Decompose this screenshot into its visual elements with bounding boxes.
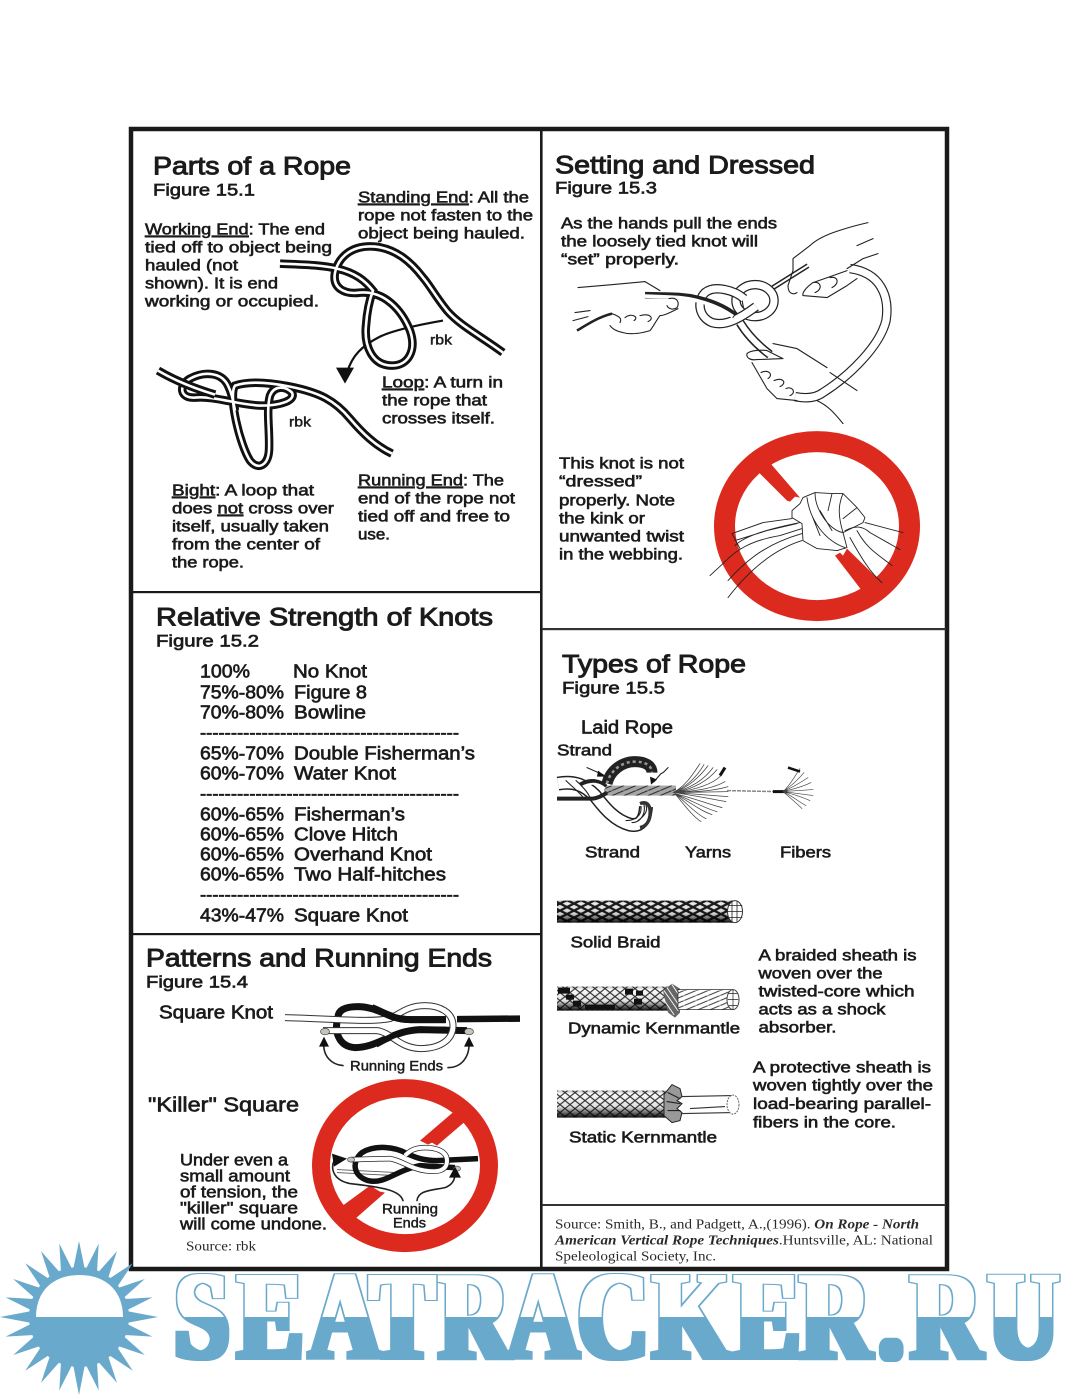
heading: Patterns and Running Ends: Patterns and Running Ends [146,945,492,973]
strength table: Double Fisherman’s [294,744,475,764]
strength table: 75%-80% [200,683,284,703]
strength table: ------------------------------------------ [200,785,459,804]
text: running end: use. [358,527,390,544]
page frame and panel dividers [131,129,947,1269]
label: Strand: Strand [557,743,612,760]
label: Running Ends: Ends [393,1215,426,1231]
panel: Parts of a Rope [144,153,533,572]
text: protective sheath: A protective sheath is [753,1060,931,1077]
text: tension warning [179,1151,327,1234]
text: working end: hauled (not [145,258,239,275]
text: standing end [358,190,533,243]
illustration: dynamic kernmantle [557,984,739,1018]
label: Running Ends: Running Ends [350,1058,443,1074]
text: bight [172,483,335,572]
labels: strand yarns fibers: Fibers [780,845,831,862]
labels: strand yarns fibers: Yarns [685,845,731,862]
text: braided sheath [757,948,916,1037]
text: running end: end of the rope not [358,491,516,508]
label: Laid Rope: Laid Rope [581,718,673,738]
figure label 15.3: Figure 15.3 [555,179,657,198]
heading: Parts of a Rope: Parts of a Rope [153,153,351,181]
text: bight: does not cross over [172,501,335,518]
label: rbk: rbk [289,414,312,430]
text: not dressed: This knot is not [559,456,685,473]
text: not dressed: unwanted twist [559,529,685,546]
text: working end: tied off to object being [145,240,332,257]
text: bight: from the center of [172,537,321,554]
strength table: 100% [200,662,250,682]
illustration: solid braid [557,901,742,923]
text: hands pull: the loosely tied knot will [561,234,758,251]
text: braided sheath: A braided sheath is [758,948,916,965]
strength table: Bowline [294,703,366,723]
text: braided sheath: acts as a shock [758,1002,887,1019]
figure label 15.5: Figure 15.5 [562,679,665,698]
text: loop [382,375,503,428]
illustration: hands setting a knot [573,223,887,424]
text: hands pull [561,216,777,269]
strength table: 60%-65% [200,825,284,845]
text: not dressed: properly. Note [559,493,675,510]
strength table: 43%-47% [200,906,284,926]
text: tension warning: will come undone. [179,1215,327,1234]
strength table: Clove Hitch [294,825,398,845]
strength table: 65%-70% [200,744,284,764]
strength table [200,662,475,926]
label: Killer Square: "Killer" Square [148,1095,299,1117]
strength table: Square Knot [294,906,408,926]
heading: Types of Rope: Types of Rope [562,651,746,679]
text: not dressed: in the webbing. [559,547,683,564]
label: Running Ends: Running [382,1201,438,1217]
text: not dressed: the kink or [559,511,646,528]
source citation [554,1218,933,1265]
illustration: static kernmantle [557,1085,739,1123]
panel: Types of Rope [554,651,933,1265]
source citation: Source: Smith, B., and Padgett, A.,(1996). On Rope - North [555,1218,919,1233]
strength table: ------------------------------------------ [200,886,459,905]
strength table: Figure 8 [294,683,367,703]
strength table: No Knot [293,662,367,682]
text: protective sheath: woven tightly over the [752,1078,933,1095]
text: braided sheath: absorber. [758,1020,836,1037]
strength table: ------------------------------------------ [200,724,459,743]
text: working end: Working End : The end [145,222,325,239]
text: protective sheath: fibers in the core. [753,1115,896,1132]
text: loop: crosses itself. [382,411,495,428]
strength table: 60%-65% [200,865,284,885]
strength table: Fisherman’s [294,805,405,825]
text: braided sheath: woven over the [757,966,883,983]
figure label 15.1: Figure 15.1 [153,181,255,200]
heading: Relative Strength of Knots: Relative Strength of Knots [156,604,493,632]
strength table: 60%-70% [200,764,284,784]
labels: strand yarns fibers: Strand [585,845,640,862]
text: protective sheath [752,1060,933,1132]
text: hands pull: “set” properly. [561,252,679,269]
text: not dressed [559,456,685,564]
text: hands pull: As the hands pull the ends [561,216,777,233]
logo: SEATRACKER.RU wordmark: SEATRACKER.RU [175,1248,1059,1386]
illustration: square knot [285,1006,520,1074]
icon: prohibition sign with undressed knot [710,442,910,611]
strength table: 60%-65% [200,845,284,865]
icon: prohibition sign with killer square knot [321,1088,489,1243]
text: loop: Loop : A turn in [382,375,503,392]
text: working end: working or occupied. [144,294,319,311]
text: running end: Running End : The [358,473,504,490]
panel: Patterns and Running Ends [146,945,520,1255]
source: rbk: Source: rbk [186,1240,256,1255]
text: loop: the rope that [382,393,488,410]
illustration: rope bight [158,371,392,466]
text: not dressed: “dressed” [559,474,642,491]
source citation: American Vertical Rope Techniques .Huntsville, AL: National [554,1234,933,1249]
strength table: 70%-80% [200,703,284,723]
panel: Setting and Dressed [555,152,910,611]
text: tension warning: small amount [180,1167,290,1186]
strength table: 60%-65% [200,805,284,825]
text: standing end: rope not fasten to the [358,208,533,225]
labels: strand yarns fibers [585,845,831,862]
figure label 15.4: Figure 15.4 [146,973,248,992]
text: tension warning: of tension, the [180,1183,298,1202]
strength table: Two Half-hitches [294,865,446,885]
illustration: laid rope [557,762,813,828]
label: Solid Braid: Solid Braid [570,935,660,952]
text: standing end: Standing End : All the [358,190,529,207]
text: tension warning: Under even a [180,1151,289,1170]
heading: Setting and Dressed: Setting and Dressed [555,152,815,180]
source citation: Speleological Society, Inc. [555,1250,716,1265]
panel: Relative Strength of Knots [156,604,493,926]
illustration: rope loop [280,246,503,384]
figure label 15.2: Figure 15.2 [156,632,259,651]
text: standing end: object being hauled. [358,226,525,243]
text: braided sheath: twisted-core which [758,984,914,1001]
label: Dynamic Kernmantle: Dynamic Kernmantle [568,1021,740,1038]
text: bight: the rope. [172,555,244,572]
text: running end [358,473,516,544]
text: tension warning: "killer" square [180,1199,298,1218]
text: working end [144,222,332,311]
text: bight: Bight : A loop that [172,483,315,500]
label: Square Knot: Square Knot [159,1003,273,1023]
logo: sun icon [0,1241,158,1395]
label: Static Kernmantle: Static Kernmantle [569,1130,717,1147]
text: running end: tied off and free to [358,509,510,526]
text: working end: shown). It is end [145,276,278,293]
text: bight: itself, usually taken [172,519,329,536]
label: rbk: rbk [430,332,453,348]
strength table: Overhand Knot [294,845,432,865]
strength table: Water Knot [294,764,396,784]
text: protective sheath: load-bearing parallel- [753,1096,931,1113]
label: Running Ends [382,1201,438,1231]
